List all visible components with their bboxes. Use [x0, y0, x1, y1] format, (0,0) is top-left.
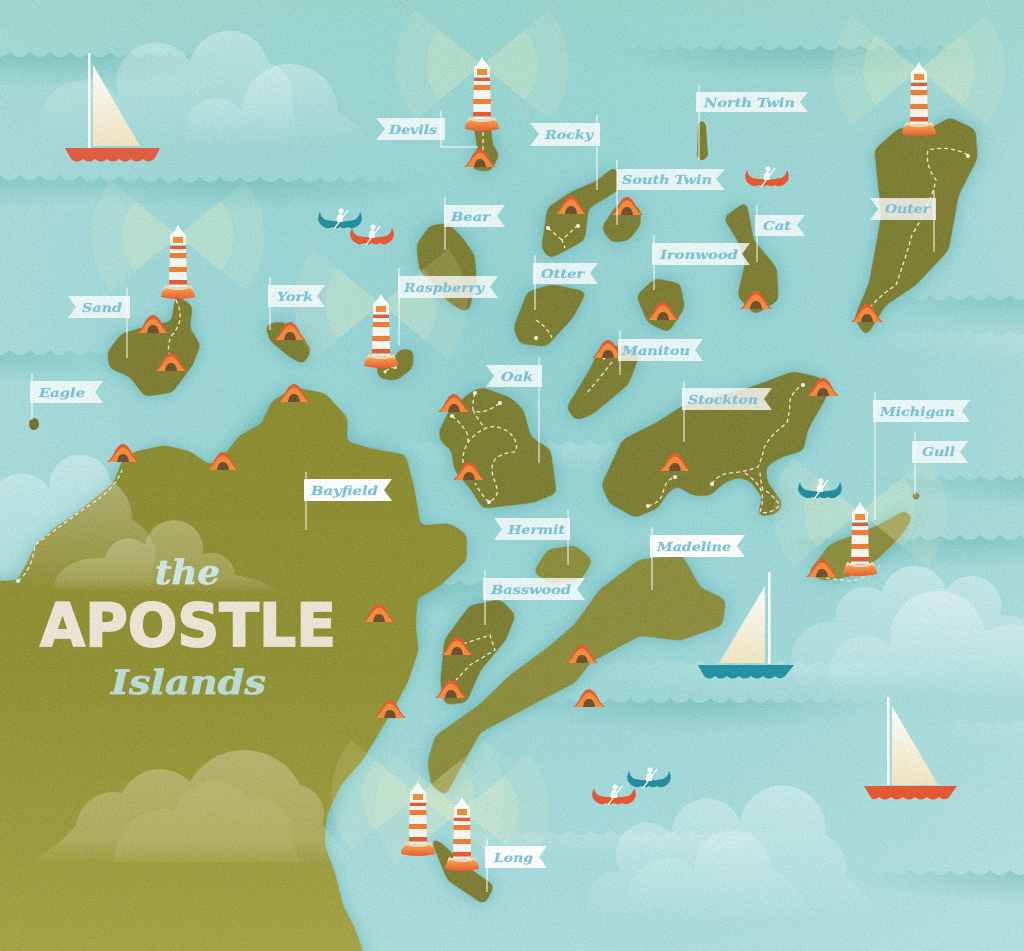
cloud: bottom land cloud front — [115, 781, 300, 862]
flag label: Oak: Oak — [501, 369, 533, 384]
flag label: Gull — [912, 432, 968, 495]
island: York — [266, 322, 311, 364]
island: Ironwood — [637, 279, 684, 332]
flag label: Bear — [444, 197, 505, 250]
flag label: York: York — [277, 289, 313, 304]
campsite tents — [107, 149, 883, 718]
flag label: Oak — [486, 357, 542, 463]
cloud: right — [791, 566, 1024, 700]
flag label: Ironwood: Ironwood — [659, 247, 738, 262]
island: Oak — [439, 388, 556, 508]
water tint at top — [0, 0, 1024, 190]
hazy islands: Hermit, Madeline, Michigan — [428, 511, 912, 795]
lighthouse: Long west — [401, 782, 435, 856]
island: North Twin — [697, 121, 708, 160]
flag label: Devils — [376, 110, 478, 147]
canoe: teal south — [627, 767, 671, 788]
flag label: Outer — [870, 190, 936, 252]
flag label: South Twin: South Twin — [622, 172, 712, 187]
cloud: right front — [828, 591, 1024, 700]
flag label: Otter: Otter — [541, 266, 586, 281]
island: Rocky — [542, 166, 618, 258]
island: Manitou — [567, 344, 640, 420]
island: Cat — [724, 202, 778, 314]
island: Raspberry — [376, 350, 413, 380]
flag label: Bayfield: Bayfield — [310, 483, 378, 498]
flag label: Long — [485, 838, 547, 892]
cloud: bottom land cloud — [30, 750, 352, 862]
flag label: Eagle — [30, 373, 103, 420]
lighthouse: Sand — [161, 225, 195, 299]
flag label: Madeline — [650, 527, 745, 590]
flag label: Cat: Cat — [763, 218, 791, 233]
flag label: Gull: Gull — [922, 444, 955, 459]
trail end markers — [16, 154, 970, 583]
flag label: Long: Long — [493, 850, 533, 865]
canoe: teal east — [798, 478, 842, 499]
cloud: top left back — [39, 31, 300, 148]
flag label: Hermit: Hermit — [507, 522, 565, 537]
lighthouse: Raspberry — [364, 294, 398, 368]
island: South Twin — [602, 204, 640, 242]
flag label: Devils: Devils — [388, 122, 437, 137]
cloud: title land cloud — [54, 520, 278, 592]
island: Basswood — [441, 600, 515, 704]
flag label: South Twin — [617, 160, 725, 225]
island: Bear — [417, 224, 476, 312]
canoe: orange north — [745, 166, 789, 187]
lighthouse: Michigan — [843, 502, 877, 576]
sailboat: red — [65, 53, 160, 162]
cloud: left coast — [0, 455, 155, 590]
flag label: Michigan — [873, 392, 970, 520]
flag label: Cat — [755, 205, 805, 262]
title line: the: the — [155, 553, 220, 593]
flag label: Basswood: Basswood — [490, 582, 571, 597]
flag label: Madeline: Madeline — [656, 539, 731, 554]
mainland: Bayfield peninsula — [0, 388, 466, 951]
flag label: Basswood — [483, 570, 585, 625]
flag label: North Twin: North Twin — [703, 95, 795, 110]
island: Stockton — [602, 372, 828, 517]
island: Eagle — [29, 418, 39, 430]
flag label: Ironwood — [652, 235, 750, 290]
title — [40, 553, 336, 703]
island: Otter — [514, 285, 586, 346]
sailboat: teal — [698, 572, 794, 678]
flag label: Raspberry — [398, 268, 498, 345]
flag label: Manitou: Manitou — [621, 343, 690, 358]
islands — [108, 118, 977, 904]
cloud: bottom center front — [630, 830, 820, 922]
island: Gull — [912, 492, 920, 500]
flag label: Hermit — [494, 510, 570, 565]
sailboat: orange — [864, 697, 957, 800]
island: Hermit — [534, 546, 592, 583]
canoe: orange south — [592, 784, 636, 805]
island: Madeline — [428, 556, 725, 795]
island: Sand — [108, 296, 200, 396]
flag label: Michigan: Michigan — [879, 404, 955, 419]
lighthouse: Outer — [902, 62, 936, 136]
island: Long — [430, 836, 494, 904]
lighthouse: Long east — [445, 797, 479, 871]
flag label: Bayfield — [304, 472, 392, 530]
hiking trails — [18, 132, 968, 680]
flag label: Rocky: Rocky — [544, 127, 594, 142]
island: Michigan — [808, 511, 912, 580]
lighthouse: Devils — [465, 57, 499, 131]
flag label: North Twin — [696, 85, 808, 160]
cloud: bottom center — [587, 786, 885, 922]
canoe: orange — [350, 224, 394, 245]
flag label: Outer: Outer — [885, 201, 932, 216]
flag label: Rocky — [530, 115, 600, 190]
flag label: Manitou — [618, 330, 703, 375]
canoe: teal — [318, 208, 362, 229]
flag label: Otter — [533, 255, 598, 310]
island: Devils — [472, 124, 499, 171]
cloud: top left front — [184, 64, 374, 148]
flag label: Eagle: Eagle — [38, 385, 85, 400]
island: Outer — [855, 118, 977, 336]
flag label: Raspberry: Raspberry — [403, 280, 485, 295]
flag label: Bear: Bear — [450, 209, 492, 224]
flag label: Sand: Sand — [82, 300, 122, 315]
flag label: Sand — [68, 288, 130, 358]
flag label: Stockton: Stockton — [688, 392, 758, 407]
title line: APOSTLE: APOSTLE — [40, 591, 336, 661]
flag label: York — [268, 277, 325, 330]
flag label: Stockton — [682, 382, 772, 442]
title line: Islands: Islands — [110, 663, 266, 703]
